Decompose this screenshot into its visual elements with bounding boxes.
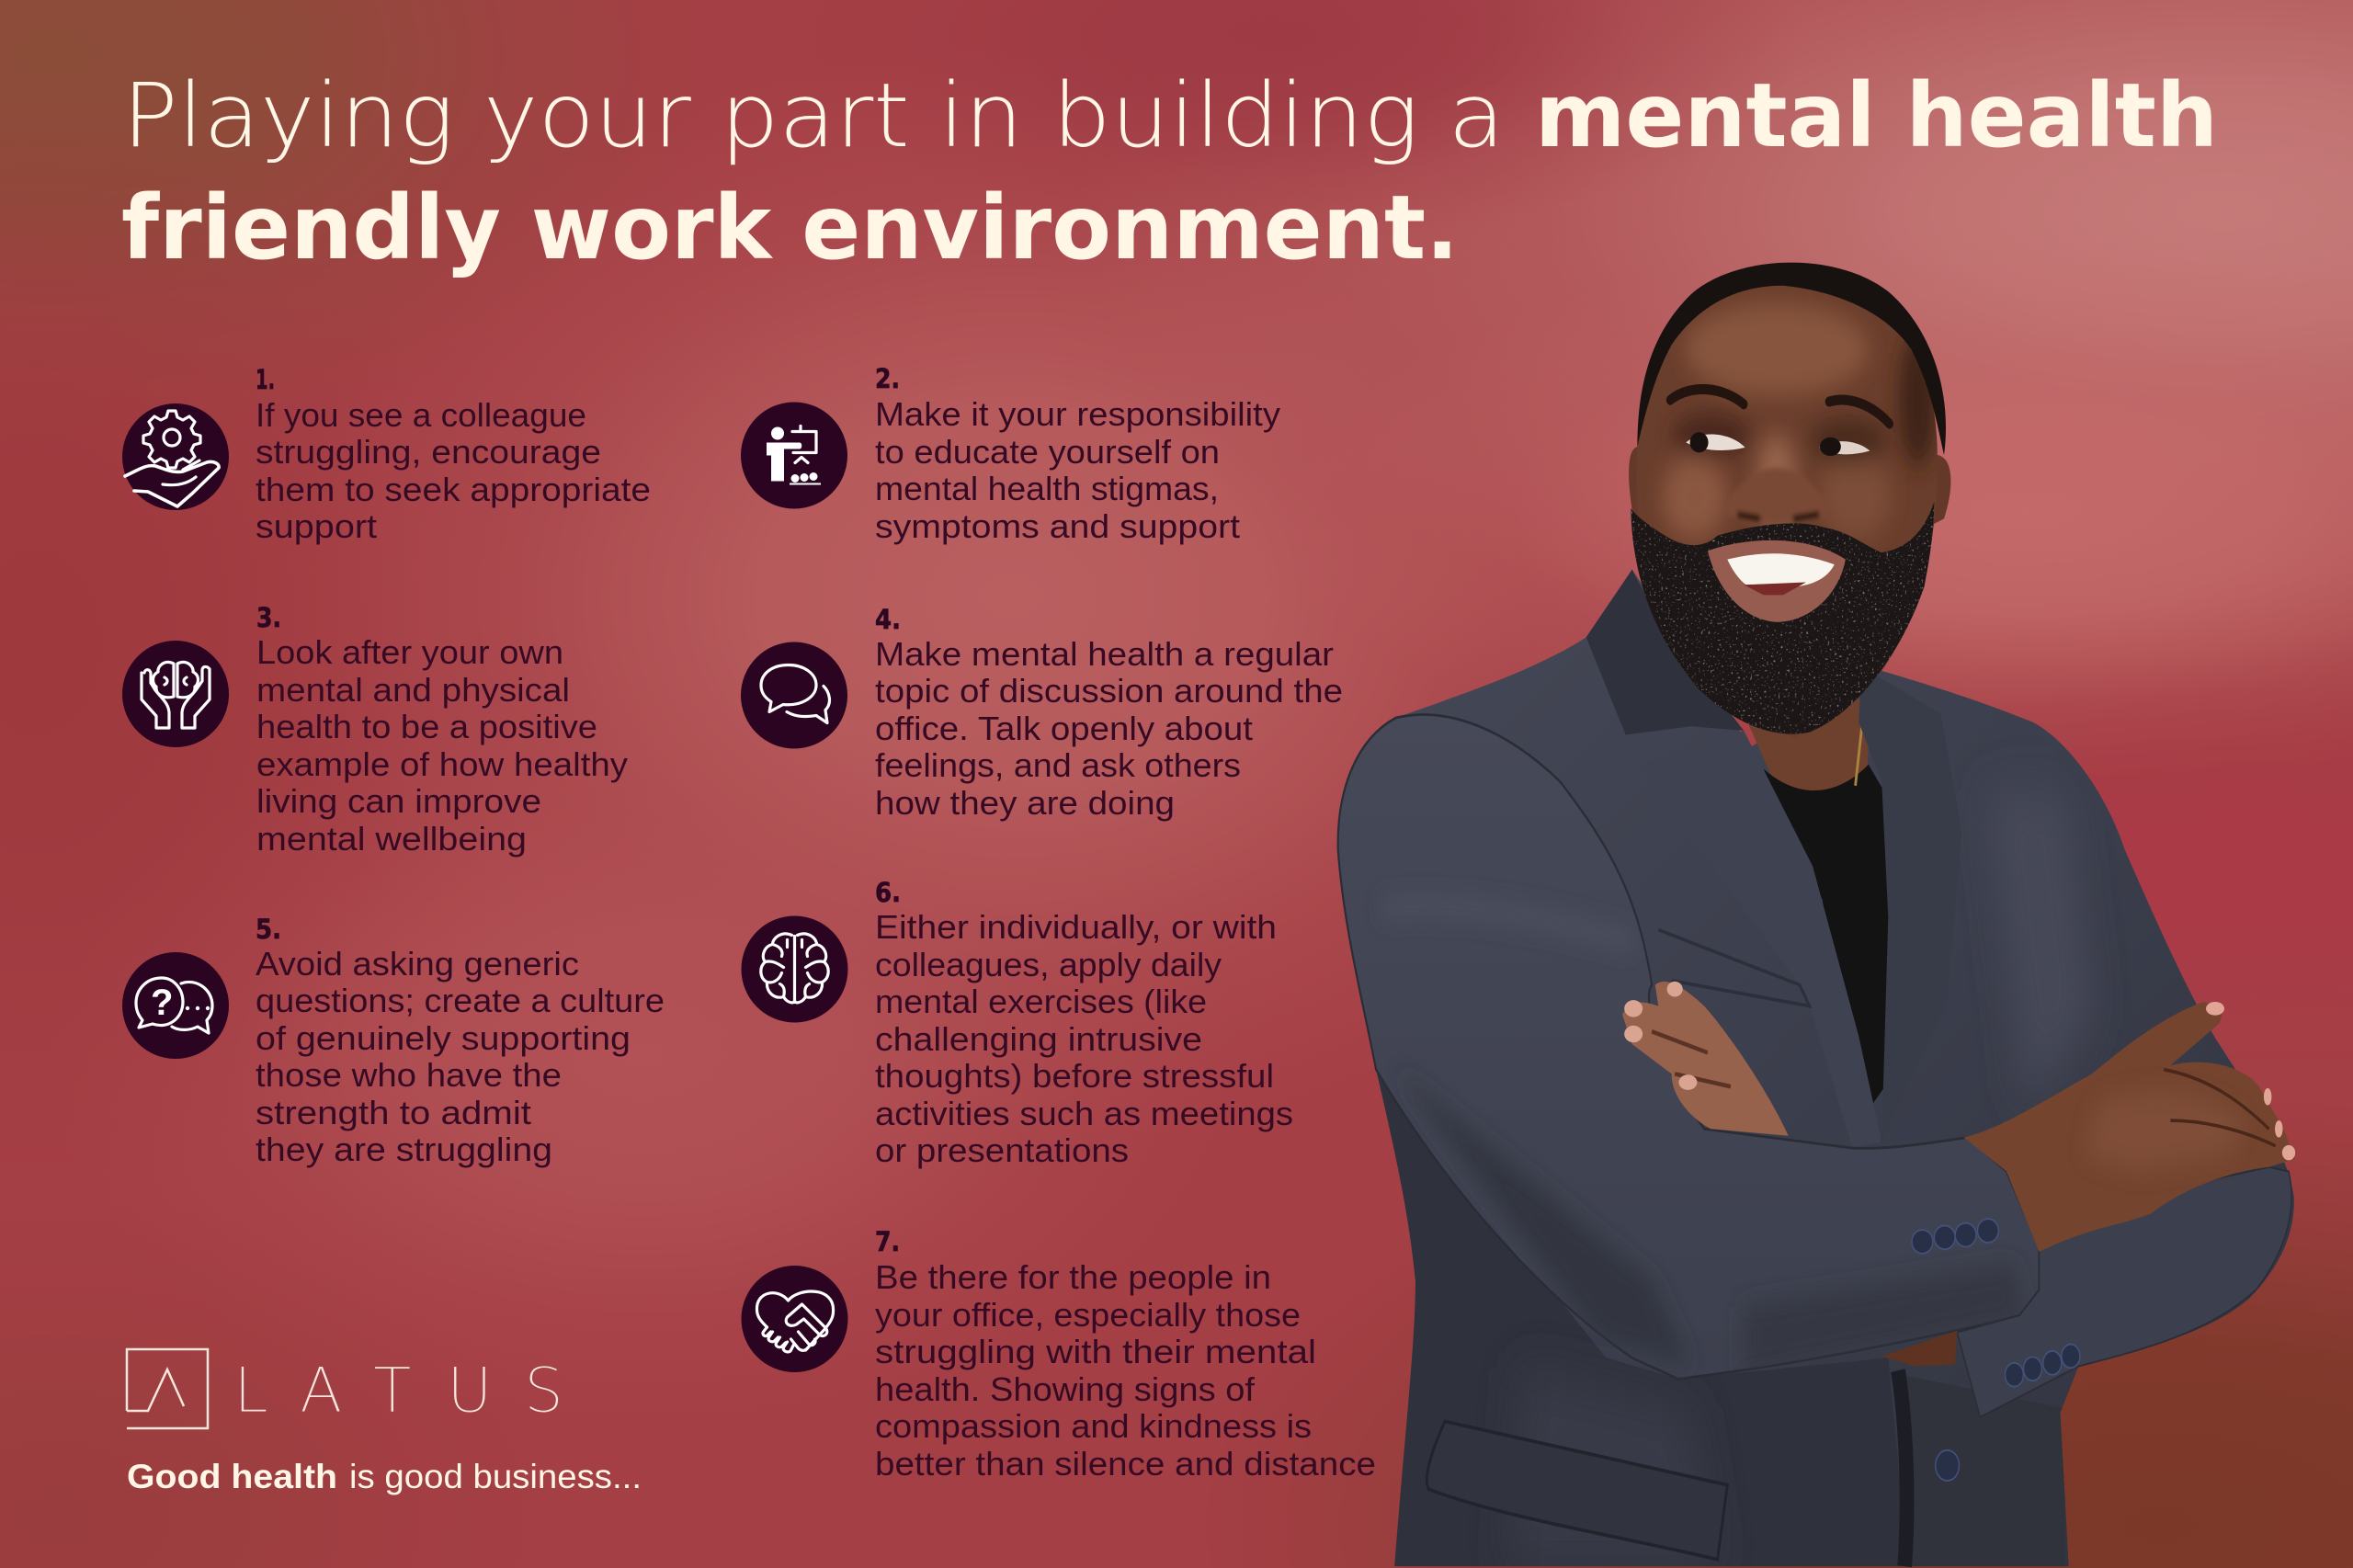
title: friendly work environment. xyxy=(121,176,1459,279)
title xyxy=(121,64,2218,279)
text: item 1: 1. xyxy=(256,364,275,395)
left hand fingers xyxy=(1622,982,1789,1136)
text: item 2: Make it your responsibility xyxy=(875,395,1280,433)
text: item 7: 7. xyxy=(875,1226,900,1257)
text: item 7: struggling with their mental xyxy=(875,1333,1316,1370)
collar xyxy=(1586,570,1744,734)
title: mental health xyxy=(1535,64,2218,167)
item 5 xyxy=(122,914,665,1168)
icon: presenter at board xyxy=(741,403,847,509)
nose xyxy=(1724,468,1828,526)
text: item 2: 2. xyxy=(875,363,900,394)
tagline: Good health xyxy=(127,1458,337,1495)
hair xyxy=(1637,263,1946,455)
text: item 7: health. Showing signs of xyxy=(875,1370,1256,1408)
text: item 4: how they are doing xyxy=(875,784,1175,822)
icon: heart handshake xyxy=(741,1266,847,1372)
neck xyxy=(1744,697,1871,807)
tagline xyxy=(127,1458,642,1495)
text: item 7: compassion and kindness is xyxy=(875,1407,1312,1445)
under hand xyxy=(1881,1331,1957,1367)
text: item 4: 4. xyxy=(875,604,901,635)
right hand xyxy=(1963,1002,2295,1252)
text: item 7: better than silence and distance xyxy=(875,1445,1376,1483)
text: item 3: mental and physical xyxy=(256,671,570,709)
text: item 3: mental wellbeing xyxy=(256,820,527,858)
text: item 3: Look after your own xyxy=(256,633,563,671)
eyebrows xyxy=(1670,389,1890,424)
text: item 6: mental exercises (like xyxy=(875,983,1207,1020)
face xyxy=(1637,273,1938,739)
text: item 7: Be there for the people in xyxy=(875,1258,1271,1296)
necklace xyxy=(1856,726,1862,786)
text: item 7 xyxy=(875,1226,1376,1483)
text: item 6: colleagues, apply daily xyxy=(875,946,1222,983)
jacket shading xyxy=(1376,790,2092,1566)
text: item 3: 3. xyxy=(256,602,281,633)
text: item 3: living can improve xyxy=(256,782,541,820)
right lapel xyxy=(1859,667,1961,1142)
eyes xyxy=(1686,432,1870,456)
text: item 3: health to be a positive xyxy=(256,708,597,745)
text: item 4: feelings, and ask others xyxy=(875,746,1241,784)
text: item 2 xyxy=(875,363,1280,545)
text: item 4: office. Talk openly about xyxy=(875,710,1253,747)
title: Playing your part in building a xyxy=(122,64,1505,167)
text: item 5: questions; create a culture xyxy=(256,982,665,1019)
icon: question and ellipsis bubbles xyxy=(122,952,229,1059)
text: item 1: support xyxy=(256,507,377,545)
jacket body xyxy=(1338,570,2294,1566)
text: item 2: symptoms and support xyxy=(875,507,1240,545)
text: item 5: Avoid asking generic xyxy=(256,945,579,983)
text: item 1 xyxy=(256,364,651,545)
text: item 5: strength to admit xyxy=(256,1094,531,1131)
teeth xyxy=(1727,553,1835,591)
item 2 xyxy=(741,363,1280,545)
text: item 7: your office, especially those xyxy=(875,1296,1301,1334)
text: item 3 xyxy=(256,602,628,858)
icon: logo square mark xyxy=(127,1349,208,1428)
text: item 6: Either individually, or with xyxy=(875,908,1277,946)
text: item 1: struggling, encourage xyxy=(256,433,601,471)
text: item 4: topic of discussion around the xyxy=(875,672,1343,710)
face highlights xyxy=(1662,302,1936,540)
sleeve shading xyxy=(1428,1103,2018,1368)
text: item 5: 5. xyxy=(256,914,281,945)
item 6 xyxy=(741,877,1293,1169)
his right arm sleeve upper xyxy=(1338,715,2040,1379)
right ear xyxy=(1927,455,1950,528)
icon: two speech bubbles xyxy=(741,642,847,748)
t-shirt xyxy=(1764,765,1893,1138)
text: item 2: mental health stigmas, xyxy=(875,470,1219,507)
photo: smiling man in suit with crossed arms xyxy=(1338,263,2295,1566)
left ear xyxy=(1629,447,1649,531)
icon: question and ellipsis bubbles: ? xyxy=(151,983,173,1023)
text: item 5: they are struggling xyxy=(256,1131,552,1168)
text: item 6: or presentations xyxy=(875,1131,1129,1169)
text: item 6 xyxy=(875,877,1293,1169)
logo: Latus xyxy=(127,1349,563,1428)
text: item 1: If you see a colleague xyxy=(256,396,586,434)
pocket flap chest xyxy=(1658,930,1810,1006)
logo wordmark: LATUS xyxy=(233,1355,563,1427)
text: item 6: 6. xyxy=(875,877,901,908)
left lapel xyxy=(1639,731,1881,1148)
sleeve left-hand second forearm xyxy=(1957,1167,2291,1417)
item 4 xyxy=(741,604,1343,822)
icon: gear in hand xyxy=(122,403,229,510)
text: item 6: thoughts) before stressful xyxy=(875,1057,1274,1095)
text: item 4: Make mental health a regular xyxy=(875,635,1334,673)
item 1 xyxy=(122,364,651,545)
icon: hands holding brain xyxy=(122,641,229,747)
text: item 5: those who have the xyxy=(256,1056,562,1094)
item 3 xyxy=(122,602,628,858)
text: item 2: to educate yourself on xyxy=(875,433,1220,471)
icon: brain xyxy=(741,915,847,1022)
lower pocket flap xyxy=(1427,1421,1727,1560)
tagline: is good business... xyxy=(349,1458,642,1495)
text: item 5: of genuinely supporting xyxy=(256,1019,631,1057)
text: item 6: challenging intrusive xyxy=(875,1020,1202,1058)
text: item 4 xyxy=(875,604,1343,822)
beard xyxy=(1631,502,1934,734)
text: item 6: activities such as meetings xyxy=(875,1095,1293,1132)
text: item 5 xyxy=(256,914,665,1168)
jacket front edge xyxy=(1898,1370,1907,1566)
text: item 3: example of how healthy xyxy=(256,745,628,783)
cuff buttons xyxy=(1912,1219,2080,1481)
mouth xyxy=(1708,540,1846,622)
text: item 1: them to seek appropriate xyxy=(256,471,651,508)
item 7 xyxy=(741,1226,1376,1483)
